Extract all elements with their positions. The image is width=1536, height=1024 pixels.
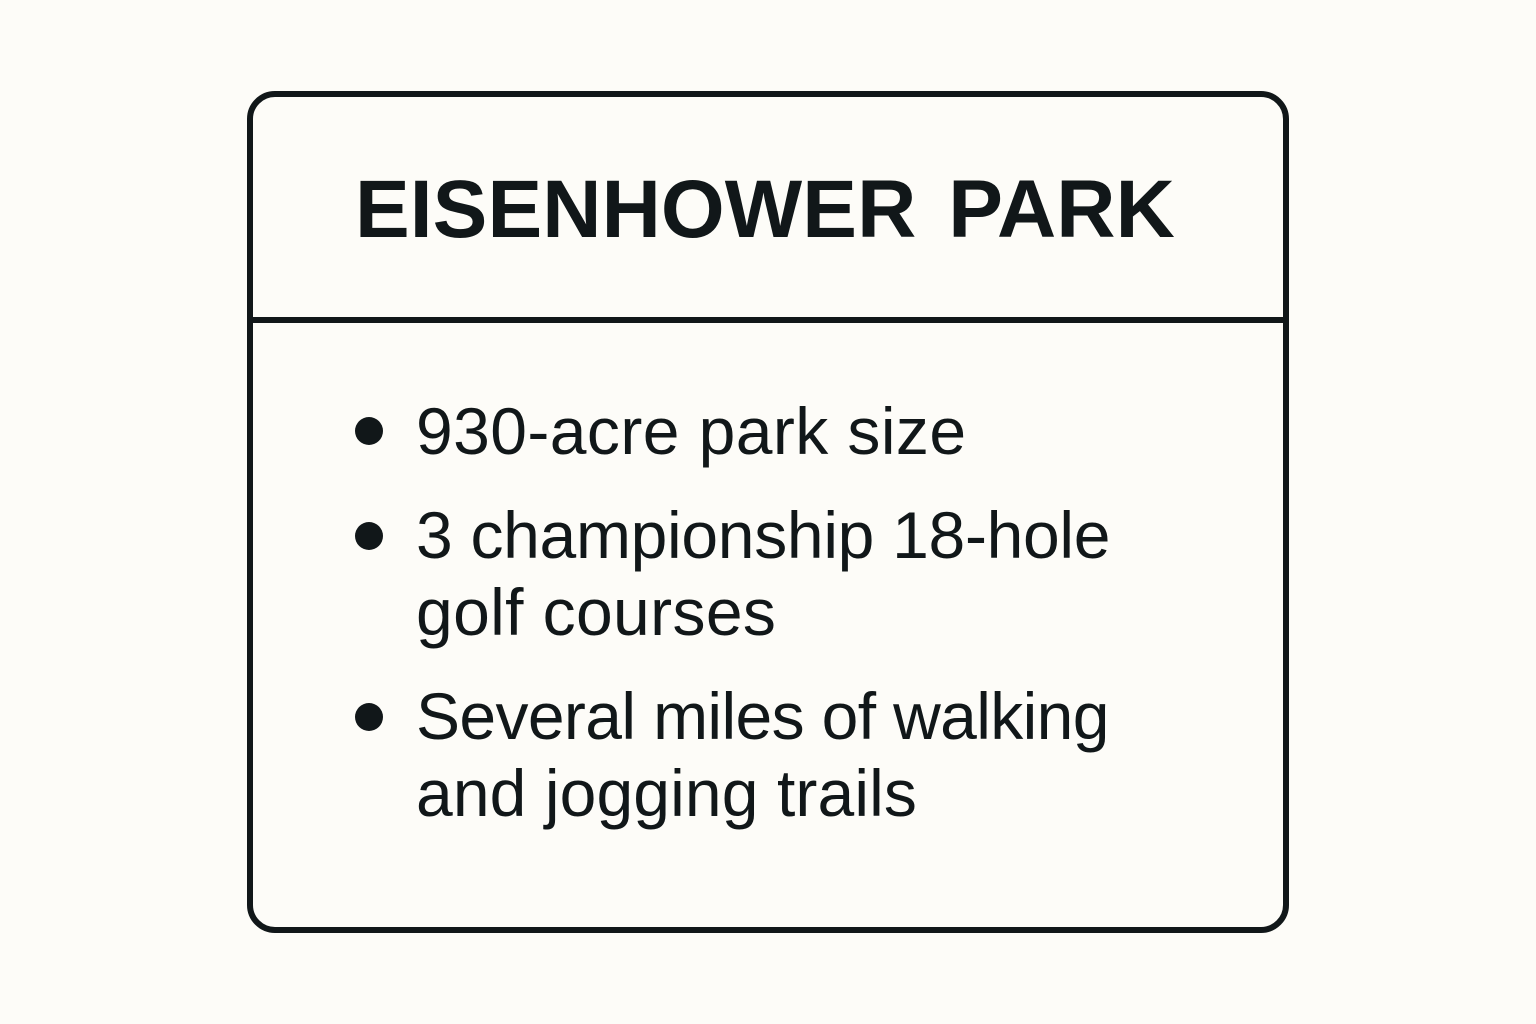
- title: EISENHOWER PARK: [355, 164, 1175, 255]
- bullet text 3: Several miles of walking: [416, 679, 1109, 753]
- bullet text 2: 3 championship 18-hole: [416, 498, 1110, 572]
- bullet text 2: [416, 498, 1110, 649]
- bullet icon 1: [355, 417, 383, 445]
- bullet text 2: golf courses: [416, 575, 776, 649]
- panel: Eisenhower Park card: [247, 91, 1289, 933]
- divider line: [250, 317, 1286, 323]
- bullet icon 2: [355, 522, 383, 550]
- bullet text 1: 930-acre park size: [416, 394, 966, 468]
- bullet icon 3: [355, 703, 383, 731]
- bullet text 3: and jogging trails: [416, 756, 917, 830]
- bullet text 3: [416, 679, 1109, 830]
